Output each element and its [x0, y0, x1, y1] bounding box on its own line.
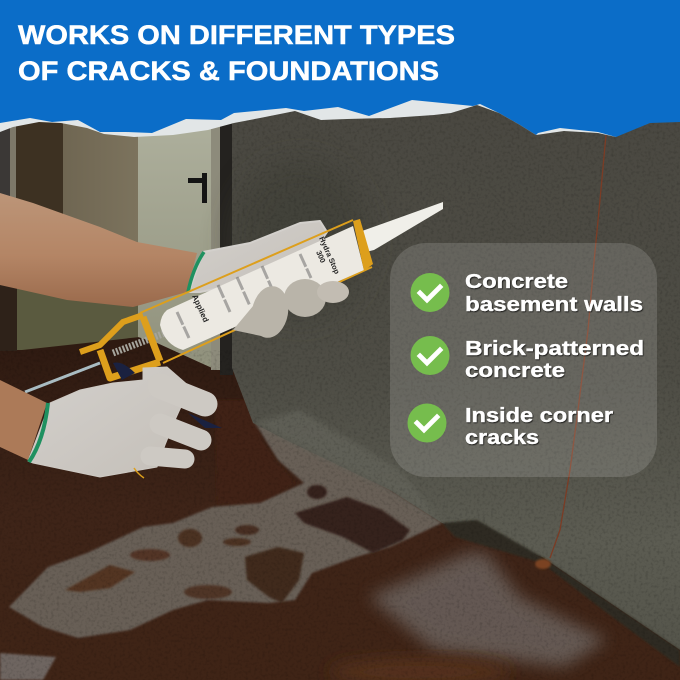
gun frame — [80, 220, 372, 378]
wall crack — [550, 135, 606, 558]
title: OF CRACKS & FOUNDATIONS — [18, 56, 439, 86]
hands and caulk gun — [0, 193, 443, 478]
blue torn paper banner — [0, 0, 680, 150]
door frame — [211, 100, 220, 370]
panel background — [390, 243, 657, 477]
tan pillar — [63, 123, 138, 242]
item: concrete basement walls — [410, 270, 643, 316]
item: brick-patterned concrete: concrete — [465, 359, 565, 382]
upper glove back — [189, 221, 327, 292]
tube label text: 300 — [314, 249, 327, 264]
upper glove fingers — [233, 279, 349, 341]
torn paper: white edge — [0, 100, 616, 160]
back wall, pale strip — [10, 126, 16, 198]
title — [18, 20, 455, 86]
floor: dark stain under glove — [216, 400, 270, 456]
dark door post — [220, 100, 233, 375]
floor: dark stains on the patch — [65, 485, 410, 603]
floor: misty reflection — [369, 553, 607, 667]
item: concrete basement walls: basement walls — [465, 293, 643, 316]
upper glove cuff — [188, 252, 204, 292]
wall: dark base band — [442, 520, 680, 667]
gun spring — [113, 333, 165, 353]
lower olive panel — [17, 285, 140, 350]
door handle — [188, 173, 207, 203]
glove cuff — [29, 403, 48, 462]
glove string — [134, 468, 144, 478]
floor: pale patch bottom left — [0, 653, 56, 680]
lower glove fingers — [150, 386, 205, 459]
trigger — [113, 362, 135, 380]
wall: dark upper patches — [218, 177, 352, 284]
wall: pale base near floor — [262, 412, 430, 516]
title: WORKS ON DIFFERENT TYPES — [18, 20, 455, 50]
wall — [232, 100, 680, 650]
tube label text: Hydra Stop — [317, 235, 342, 276]
item: inside corner cracks: Inside corner — [465, 404, 613, 427]
tube yellow cap — [353, 219, 373, 271]
lower glove — [28, 367, 190, 477]
door — [138, 129, 212, 368]
back wall, brown bricks — [16, 122, 63, 214]
checklist panel — [390, 243, 657, 477]
tube label text — [190, 235, 342, 324]
trigger blade — [188, 413, 222, 428]
tube label text: Applied — [190, 293, 210, 324]
item: inside corner cracks: cracks — [465, 426, 539, 449]
item: brick-patterned concrete — [410, 336, 644, 382]
caulk gun rod — [25, 363, 100, 392]
back wall, dark left strip — [0, 128, 10, 196]
floor: rust tint — [330, 658, 510, 680]
crack stain — [535, 559, 551, 569]
floor — [0, 330, 680, 680]
item: inside corner cracks — [408, 404, 613, 449]
tube nozzle — [362, 202, 443, 252]
item: concrete basement walls: Concrete — [465, 270, 568, 293]
tube label fine print — [177, 254, 311, 338]
lower arm — [0, 380, 47, 460]
floor: pale dried patch — [9, 423, 442, 638]
item: brick-patterned concrete: Brick-patterned — [465, 337, 644, 360]
lower wall, dark — [0, 285, 17, 330]
tube body — [160, 226, 364, 350]
upper arm — [0, 193, 197, 307]
